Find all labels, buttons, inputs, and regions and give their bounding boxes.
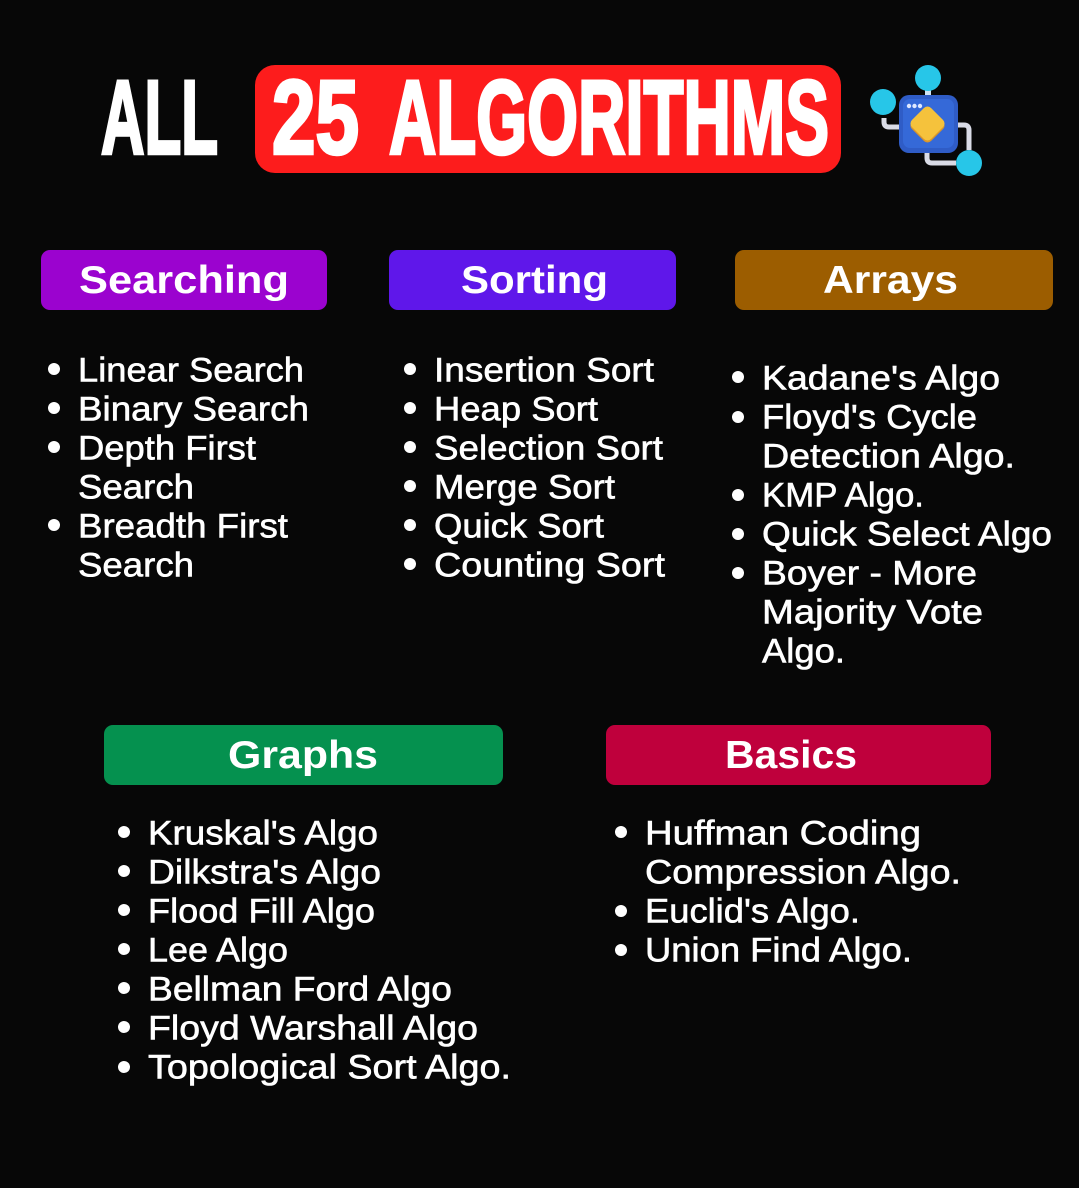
list: sorting: Heap Sort (434, 390, 599, 428)
list: searching (48, 352, 309, 584)
list: basics: Huffman Coding (645, 814, 921, 852)
list: arrays: Detection Algo. (762, 438, 1015, 476)
list: searching: Search (78, 546, 194, 584)
heading: graphs: Graphs (228, 734, 378, 777)
list: graphs: Kruskal's Algo (148, 814, 378, 852)
list: searching: Binary Search (78, 390, 309, 428)
title (101, 60, 841, 176)
title badge: ALGORITHMS (389, 60, 829, 176)
heading: graphs (104, 725, 503, 785)
title badge: 25 (272, 60, 359, 176)
list: arrays: Algo. (762, 632, 845, 670)
list: searching: Search (78, 468, 194, 506)
heading: basics: Basics (725, 734, 857, 777)
list: sorting: Merge Sort (434, 468, 616, 506)
list: basics (615, 814, 961, 970)
list: graphs: Bellman Ford Algo (148, 970, 452, 1008)
list: graphs: Lee Algo (148, 932, 288, 970)
panel: sorting (389, 250, 676, 584)
list: arrays: Floyd's Cycle (762, 398, 977, 436)
list: arrays: Quick Select Algo (762, 516, 1052, 554)
icon: algorithm nodes (870, 65, 982, 176)
list: graphs: Dilkstra's Algo (148, 854, 381, 892)
list: searching: Breadth First (78, 508, 289, 546)
heading: searching: Searching (79, 259, 289, 302)
heading: arrays (735, 250, 1053, 310)
heading: sorting (389, 250, 676, 310)
heading: searching (41, 250, 327, 310)
list: sorting (404, 352, 666, 584)
list: arrays: KMP Algo. (762, 476, 924, 514)
panel: graphs (104, 725, 511, 1086)
list: basics: Union Find Algo. (645, 932, 912, 970)
title word: ALL: ALL (101, 60, 218, 176)
list: basics: Euclid's Algo. (645, 892, 860, 930)
list: graphs: Flood Fill Algo (148, 892, 375, 930)
list: sorting: Counting Sort (434, 546, 666, 584)
panel: arrays (732, 250, 1053, 670)
list: arrays: Boyer - More (762, 554, 977, 592)
panel: searching (41, 250, 327, 584)
list: arrays: Kadane's Algo (762, 360, 1000, 398)
list: graphs: Floyd Warshall Algo (148, 1010, 478, 1048)
list: arrays (732, 360, 1052, 670)
list: graphs: Topological Sort Algo. (148, 1048, 511, 1086)
list: basics: Compression Algo. (645, 854, 961, 892)
list: searching: Depth First (78, 430, 257, 468)
heading: sorting: Sorting (461, 259, 608, 302)
list: sorting: Quick Sort (434, 508, 605, 546)
panel: basics (606, 725, 991, 970)
list: arrays: Majority Vote (762, 594, 983, 632)
list: graphs (118, 814, 511, 1086)
list: sorting: Selection Sort (434, 430, 664, 468)
heading: basics (606, 725, 991, 785)
title badge (255, 60, 841, 176)
heading: arrays: Arrays (823, 259, 958, 302)
list: searching: Linear Search (78, 352, 304, 390)
list: sorting: Insertion Sort (434, 352, 655, 390)
